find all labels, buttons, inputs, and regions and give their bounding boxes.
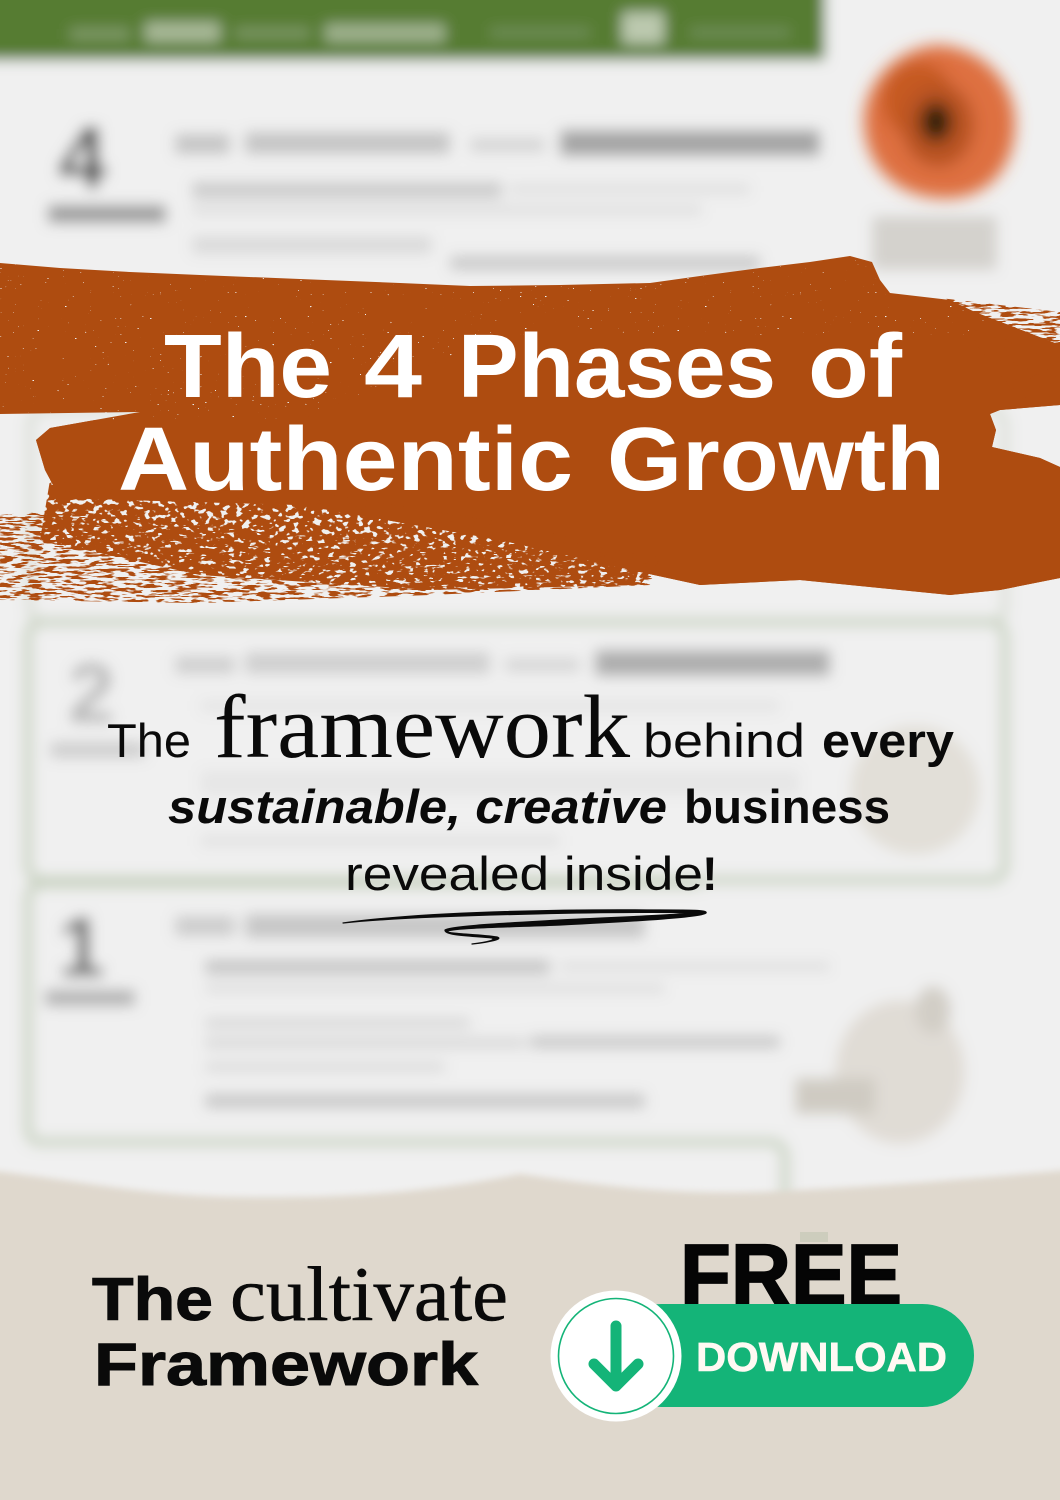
icon: download arrow in circle bbox=[550, 1290, 682, 1422]
scribble underline bbox=[343, 910, 706, 944]
title: Phases bbox=[458, 317, 776, 417]
footer title: The cultivate Framework: cultivate bbox=[230, 1251, 508, 1337]
footer beige band bbox=[0, 1168, 1060, 1500]
title bbox=[118, 317, 945, 510]
subheading text block: every bbox=[822, 714, 954, 767]
phase 3 box outline bbox=[30, 410, 1005, 622]
subheading text block: business bbox=[684, 780, 890, 833]
brush stroke banner bbox=[0, 256, 1060, 603]
title: Growth bbox=[607, 410, 945, 510]
subheading text block: framework bbox=[214, 678, 630, 777]
footer title: The cultivate Framework: Framework bbox=[94, 1331, 479, 1398]
title: 4 bbox=[364, 317, 422, 417]
green header bar bbox=[0, 0, 825, 60]
phase 1 box: 1 bbox=[58, 900, 105, 994]
subheading text block: ! bbox=[702, 847, 718, 900]
footer title: The cultivate Framework bbox=[92, 1251, 508, 1398]
subheading text block: sustainable, creative bbox=[168, 780, 667, 833]
phase 4 row: 4 bbox=[58, 108, 107, 207]
subheading text block: The bbox=[107, 714, 191, 767]
title: of bbox=[808, 317, 903, 417]
flower caption bbox=[872, 216, 997, 270]
flower photo bbox=[864, 45, 1015, 198]
subheading text block: behind bbox=[643, 714, 805, 767]
phase 4 row bbox=[48, 108, 820, 270]
subheading text block bbox=[107, 678, 954, 900]
phase 2 box: 2 bbox=[68, 646, 115, 740]
phase 1 box bbox=[28, 884, 965, 1215]
download button bbox=[550, 1290, 974, 1422]
download label: DOWNLOAD bbox=[696, 1334, 947, 1380]
title: The bbox=[164, 317, 332, 417]
phase 2 box bbox=[28, 622, 1005, 880]
title: Authentic bbox=[118, 410, 573, 510]
FREE label: FREE bbox=[680, 1227, 902, 1324]
footer title: The cultivate Framework: The bbox=[92, 1266, 213, 1333]
subheading text block: revealed inside bbox=[345, 847, 703, 900]
